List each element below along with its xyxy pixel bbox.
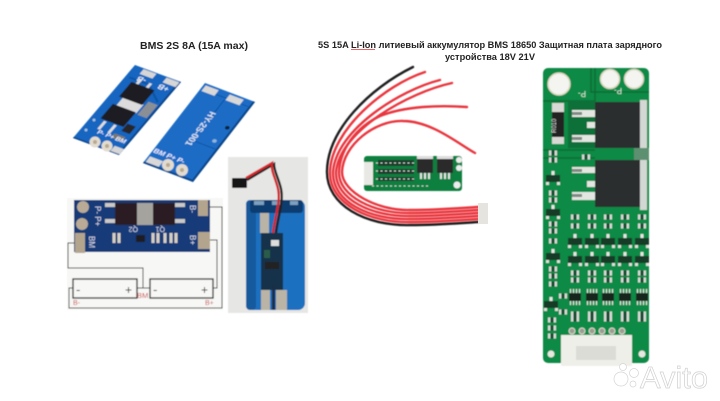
MOSFETs: [640, 100, 647, 210]
solder joints: [569, 328, 625, 334]
photo: large green BMS board: R010: [552, 118, 558, 133]
title: 5S 15A: [318, 40, 662, 63]
bottom mount holes: [548, 350, 554, 358]
photo: wiring diagram: +: [125, 283, 132, 297]
title: 5S 15A: устройства 18V 21V: [445, 52, 536, 63]
photo: large green BMS board: P-: [614, 86, 622, 95]
photo: wiring diagram: BM: [87, 236, 96, 248]
photo: wiring diagram: P- P+: [93, 206, 102, 227]
photo: blue BMS board, component side: [73, 65, 181, 155]
photo: wiring diagram: -: [76, 282, 80, 297]
connector: wire harness plug: [478, 203, 488, 224]
photo: wiring diagram: [67, 198, 223, 310]
component grid: [568, 214, 649, 322]
mounting holes: [548, 73, 570, 95]
photo: blue BMS board, component side: +B: [155, 82, 171, 93]
photo: wiring diagram: B+: [188, 235, 197, 245]
photo: wiring diagram: -: [153, 282, 157, 297]
photo: blue BMS board, back side: BM P+ P-: [151, 147, 188, 165]
photo: wiring diagram: B+: [205, 300, 214, 307]
watermark: Avito: Avito: [640, 360, 708, 395]
photo: wiring diagram: B-: [188, 205, 197, 213]
shunt resistor: [552, 103, 564, 112]
photo: large green BMS board: [543, 68, 649, 366]
photo: wire harness: [327, 67, 478, 225]
photo: wiring diagram: B-: [73, 300, 81, 307]
photo: wiring diagram: Q1: [156, 225, 165, 232]
solder pads, component side: [90, 136, 100, 148]
title: 5S 15A: 5S 15A Li-Ion литиевый аккумулятор BMS 18650 Защитная плата зарядного: [318, 40, 662, 51]
photo: large green BMS board: P-: [578, 89, 586, 98]
solder pads, back side: [162, 159, 174, 171]
photo: wiring diagram: BM: [137, 291, 148, 300]
white connector: [561, 335, 632, 366]
left component column: [544, 150, 590, 338]
photo: wiring diagram: Q2: [129, 225, 138, 232]
photo: wiring diagram: +: [201, 283, 208, 297]
photo: small green BMS board: [364, 156, 462, 191]
photo: blue BMS board, component side: P- P+ BM: [95, 129, 128, 145]
photo: blue BMS board, component side: -B: [134, 75, 148, 84]
photo: blue BMS board, back side: [143, 83, 255, 182]
title: BMS 2S: BMS 2S 8A (15A max): [140, 40, 248, 52]
photo: battery pack: [228, 157, 308, 313]
photo: blue BMS board, back side: HY-2S-001: [183, 110, 218, 147]
